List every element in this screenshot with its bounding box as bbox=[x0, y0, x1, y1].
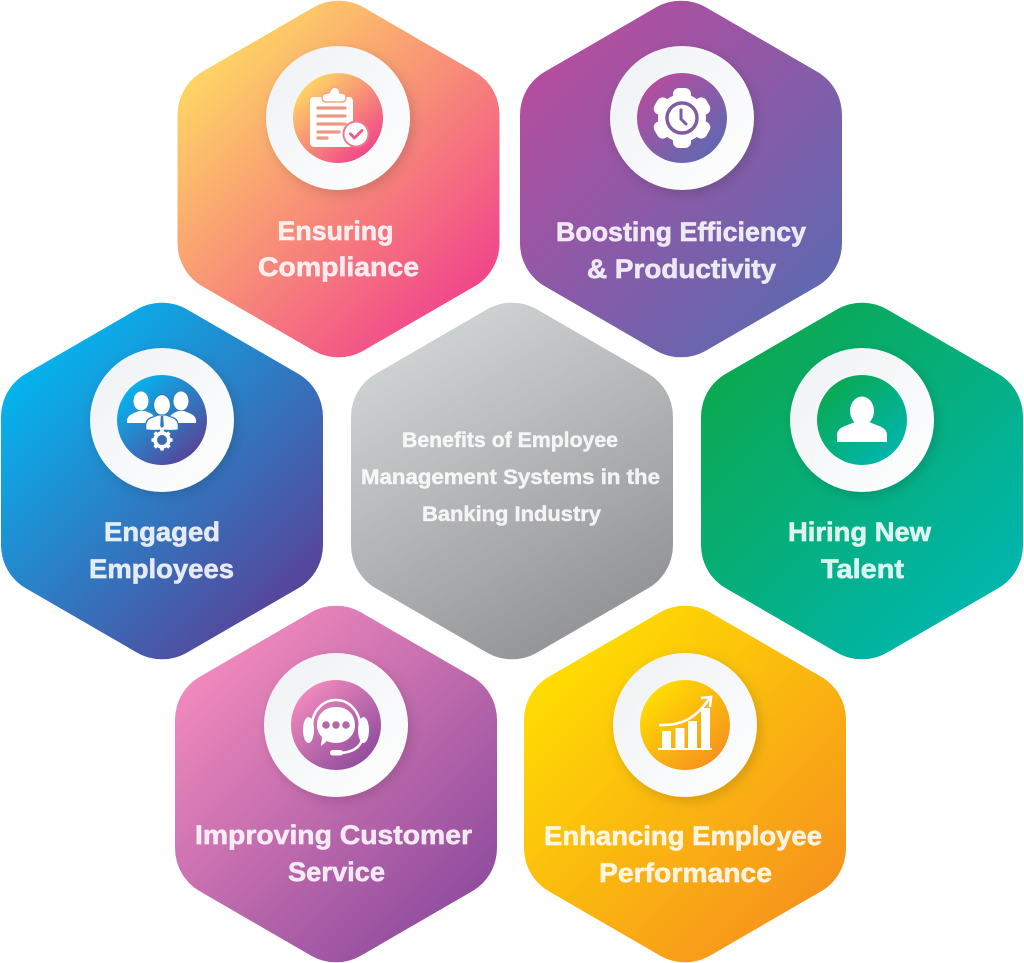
heading: Hiring New Talent bbox=[788, 517, 932, 584]
heading: Boosting Efficiency & Productivity: Boosting Efficiency bbox=[556, 217, 806, 247]
icon: gear with clock bbox=[610, 46, 754, 190]
panel: Hiring New Talent bbox=[701, 303, 1023, 659]
panel: Engaged Employees bbox=[1, 303, 323, 659]
icon: headset with chat bubble bbox=[264, 653, 408, 797]
heading: Engaged Employees: Engaged bbox=[104, 517, 220, 547]
panel: Improving Customer Service bbox=[175, 606, 497, 962]
heading: central title: Management Systems in the bbox=[361, 466, 660, 489]
heading: Hiring New Talent: Hiring New bbox=[788, 517, 932, 547]
panel: Boosting Efficiency & Productivity bbox=[520, 1, 842, 357]
panel: Ensuring Compliance bbox=[178, 1, 500, 357]
heading: Improving Customer Service bbox=[195, 820, 473, 887]
icon: person bbox=[790, 348, 934, 492]
heading: Ensuring Compliance: Ensuring bbox=[278, 216, 394, 246]
heading: Enhancing Employee Performance bbox=[544, 821, 822, 888]
heading: Boosting Efficiency & Productivity bbox=[556, 217, 806, 284]
heading: Engaged Employees bbox=[89, 517, 234, 584]
heading: central title: Banking Industry bbox=[422, 503, 601, 526]
heading: central title bbox=[361, 429, 660, 526]
heading: Enhancing Employee Performance: Performance bbox=[599, 858, 772, 888]
heading: Ensuring Compliance bbox=[258, 216, 419, 282]
heading: Enhancing Employee Performance: Enhancing Employee bbox=[544, 821, 822, 851]
heading: Engaged Employees: Employees bbox=[89, 554, 234, 584]
icon: team with gear bbox=[90, 348, 234, 492]
heading: Hiring New Talent: Talent bbox=[821, 554, 904, 584]
heading: Improving Customer Service: Service bbox=[288, 857, 385, 887]
panel: central topic bbox=[351, 303, 673, 659]
heading: Improving Customer Service: Improving Customer bbox=[195, 820, 473, 850]
heading: Ensuring Compliance: Compliance bbox=[258, 252, 419, 282]
panel: Enhancing Employee Performance bbox=[524, 606, 846, 962]
icon: clipboard with check bbox=[266, 46, 410, 190]
heading: central title: Benefits of Employee bbox=[402, 429, 618, 452]
icon: growth bar chart bbox=[613, 653, 757, 797]
heading: Boosting Efficiency & Productivity: & Productivity bbox=[587, 254, 776, 284]
